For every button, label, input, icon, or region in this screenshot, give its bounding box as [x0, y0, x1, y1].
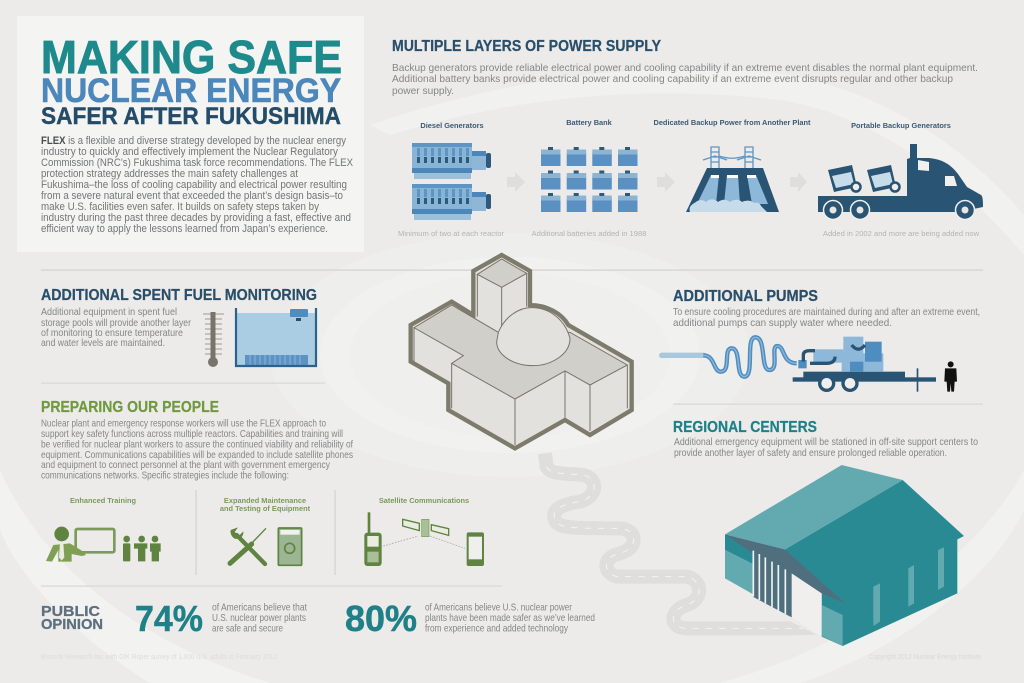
icon: person for scale	[944, 361, 957, 392]
nuclear plant building	[411, 255, 632, 448]
text block	[41, 418, 353, 482]
power supply text: power supply.	[392, 86, 454, 97]
enhanced training: Enhanced Training	[70, 496, 137, 505]
arrow	[657, 172, 675, 192]
public opinion	[41, 598, 595, 639]
label	[41, 603, 103, 633]
satellite communications: Satellite Communications	[379, 496, 469, 505]
battery bank: Battery Bank	[566, 118, 613, 127]
heading: REGIONAL CENTERS	[673, 419, 817, 436]
satellite communications	[364, 496, 484, 566]
title: MAKING SAFE	[41, 31, 342, 83]
intro text: industry to quickly and effectively implement the Nuclear Regulatory	[41, 146, 339, 158]
icon: thermometer	[203, 312, 224, 367]
stat: 80%	[345, 598, 595, 639]
source note: Bisconti Research Inc. with GfK Roper survey of 1,000 U.S. adults in February 2012	[41, 654, 277, 661]
stat: 74%: 74%	[135, 598, 203, 639]
icon: dam	[686, 168, 779, 212]
icon: trainer and students	[46, 527, 161, 562]
portable backup generators: Added in 2002 and more are being added now	[823, 229, 980, 238]
stat: 74%: of Americans believe that	[212, 602, 307, 614]
icon: portable generator 1	[828, 165, 860, 192]
icon: portable generator 2	[867, 165, 900, 192]
expanded maintenance	[220, 496, 311, 565]
heading: ADDITIONAL SPENT FUEL MONITORING	[41, 287, 317, 304]
text block	[41, 307, 191, 349]
expanded maintenance: and Testing of Equipment	[220, 504, 311, 513]
icon: tools and meter	[230, 527, 302, 565]
intro text: Fukushima–the loss of cooling capability and electrical power resulting	[41, 179, 347, 191]
regional center warehouse	[725, 465, 964, 646]
icon: radio, satellite, phone	[364, 512, 484, 566]
intro text: Commission (NRC’s) Fukushima task force recommendations. The FLEX	[41, 157, 353, 169]
panel: additional pumps	[662, 288, 980, 392]
text block: additional pumps can supply water where needed.	[673, 318, 892, 329]
heading: ADDITIONAL PUMPS	[673, 288, 818, 305]
text block: of monitoring to ensure temperature	[41, 328, 183, 339]
arrow	[507, 172, 525, 192]
panel: regional centers	[673, 419, 978, 459]
panel: intro	[17, 16, 364, 252]
text block	[674, 437, 978, 459]
road	[545, 453, 817, 635]
diesel generators: Minimum of two at each reactor	[398, 229, 504, 238]
intro text: protection strategy addresses the main safety challenges at	[41, 168, 298, 180]
dedicated backup power	[653, 118, 811, 212]
text block: Nuclear plant and emergency response workers will use the FLEX approach to	[41, 418, 326, 430]
power supply text: Backup generators provide reliable electrical power and cooling capability if an extreme event disables the normal plant equipment.	[392, 63, 978, 74]
heading: PREPARING OUR PEOPLE	[41, 399, 219, 416]
battery bank: Additional batteries added in 1988	[532, 229, 646, 238]
intro text	[41, 135, 353, 235]
icon: generator 2	[412, 184, 491, 220]
heading: multiple layers of power supply: MULTIPLE LAYERS OF POWER SUPPLY	[392, 38, 661, 55]
stat: 74%: U.S. nuclear power plants	[212, 612, 306, 624]
stat: 74%	[135, 598, 307, 639]
portable backup generators	[818, 121, 983, 238]
stat: 80%: from experience and added technology	[425, 622, 569, 634]
stat: 80%: 80%	[345, 598, 417, 639]
stat: 74%: are safe and secure	[212, 622, 283, 634]
label: PUBLIC	[41, 603, 100, 620]
stat: 80%: plants have been made safer as we’ve learned	[425, 612, 595, 624]
text block: support key safety functions across multiple reactors. Capabilities and training will	[41, 429, 343, 440]
text block	[673, 307, 980, 329]
title: NUCLEAR ENERGY	[41, 72, 341, 110]
icon: truck	[818, 144, 983, 220]
text block: storage pools will provide another layer	[41, 318, 191, 329]
title	[41, 31, 342, 130]
icon: generator 1	[412, 143, 491, 179]
text block: Additional equipment in spent fuel	[41, 307, 177, 318]
intro text: efficient way to apply the lessons learned from Japan’s experience.	[41, 223, 328, 235]
panel: spent fuel monitoring	[41, 287, 317, 367]
stat: 80%: of Americans believe U.S. nuclear power	[425, 602, 572, 614]
diesel generators	[398, 121, 504, 238]
arrow	[790, 172, 807, 192]
expanded maintenance: Expanded Maintenance	[224, 496, 306, 505]
text block: and equipment to connect personnel at the plant with government emergency	[41, 460, 331, 471]
portable backup generators: Portable Backup Generators	[851, 121, 951, 130]
intro text: from a severe natural event that exceeded the plant’s design basis–to	[41, 190, 343, 202]
power supply text: Additional battery banks provide electrical power and cooling capability if an extreme event disrupts regular and other backup	[392, 74, 953, 85]
intro text: industry during the past three decades by providing a fast, effective and	[41, 212, 351, 224]
label: OPINION	[41, 616, 103, 633]
diesel generators: Diesel Generators	[420, 121, 484, 130]
power supply text	[392, 63, 978, 97]
copyright: Copyright 2012 Nuclear Energy Institute	[869, 654, 981, 661]
icon: pump trailer and hose	[662, 337, 936, 392]
panel: preparing our people	[41, 399, 484, 575]
text block: communications networks. Specific strategies include the following:	[41, 470, 289, 482]
text block: be verified for nuclear plant workers to assure the continued viability and reliability of	[41, 440, 353, 450]
icon: pylons	[703, 147, 761, 168]
text block: Additional emergency equipment will be stationed in off-site support centers to	[674, 437, 978, 448]
icon: fuel pool	[235, 308, 317, 367]
battery bank	[532, 118, 646, 238]
dedicated backup power: Dedicated Backup Power from Another Plant	[653, 118, 811, 127]
enhanced training	[46, 496, 161, 562]
icon: batteries	[541, 147, 638, 212]
title: SAFER AFTER FUKUSHIMA	[41, 103, 341, 130]
text block: provide another layer of safety and ensure prolonged reliable operation.	[674, 448, 947, 459]
intro text: make U.S. facilities even safer. It builds on safety steps taken by	[41, 201, 320, 213]
intro text: FLEX is a flexible and diverse strategy developed by the nuclear energy	[41, 135, 347, 147]
text block: equipment. Communications capabilities will be expanded to include satellite phones	[41, 450, 353, 461]
text block: and water levels are maintained.	[41, 338, 165, 349]
